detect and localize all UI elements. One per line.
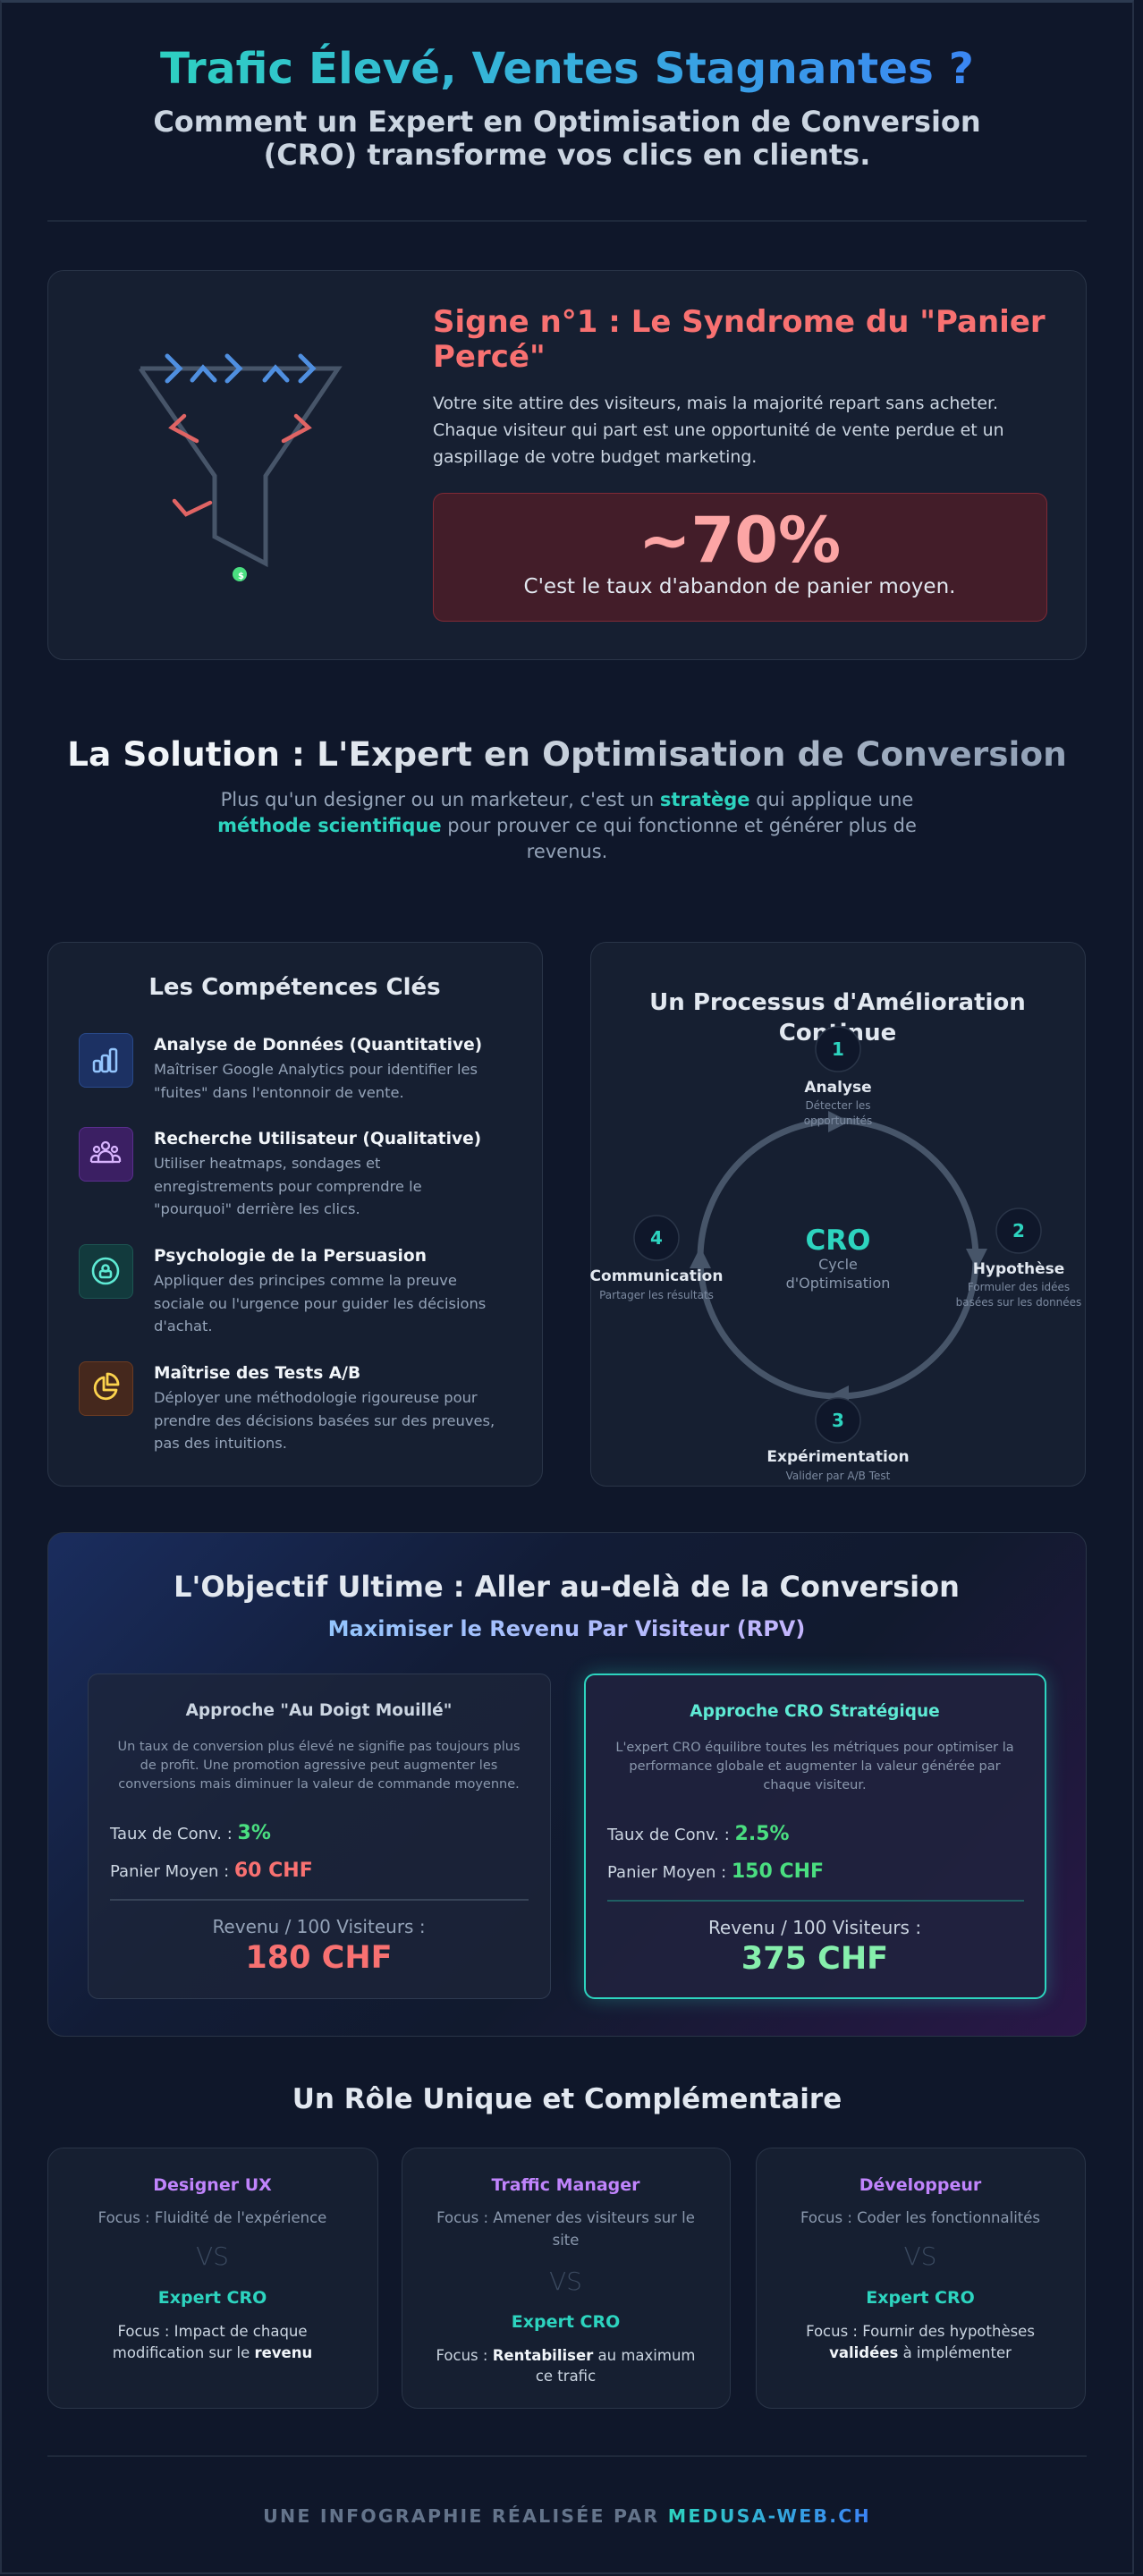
panel: traffic manager vs expert CRO: Focus : Amener des visiteurs sur le [436, 2209, 695, 2226]
title: Trafic Élevé, Ventes Stagnantes ? [160, 44, 974, 94]
step 3 expérimentation: 3 [832, 1410, 844, 1431]
skill: psychologie de la persuasion: d'achat. [154, 1318, 213, 1335]
skill: analyse de données [79, 1033, 482, 1101]
skill: recherche utilisateur [79, 1127, 481, 1217]
step 2 hypothèse: basées sur les données [956, 1296, 1081, 1309]
skill: tests A/B: Déployer une méthodologie rigoureuse pour [154, 1389, 478, 1406]
card: approche au doigt mouillé: Panier Moyen : 60 CHF [110, 1860, 313, 1882]
text block: description: Chaque visiteur qui part est une opportunité de vente perdue et un [433, 420, 1004, 440]
heading: signe n°1: Signe n°1 : Le Syndrome du "Panier [433, 304, 1046, 340]
card: approche CRO stratégique: L'expert CRO équilibre toutes les métriques pour optimiser la [615, 1741, 1014, 1755]
icon: leaky funnel: $ [238, 572, 244, 581]
step 1 analyse: Analyse [804, 1079, 872, 1097]
card: approche au doigt mouillé: Un taux de conversion plus élevé ne signifie pas toujours plus [118, 1740, 521, 1754]
panel: traffic manager vs expert CRO: site [553, 2232, 579, 2249]
icon: persuasion [79, 1244, 133, 1299]
panel: signe n°1 panier percé [47, 270, 1087, 660]
skill: psychologie de la persuasion: Appliquer des principes comme la preuve [154, 1272, 457, 1289]
panel: objectif ultime [47, 1532, 1087, 2037]
card: approche au doigt mouillé: Revenu / 100 Visiteurs : [212, 1916, 426, 1937]
card: approche au doigt mouillé: Taux de Conv. : 3% [110, 1822, 271, 1844]
step 2 hypothèse: Formuler des idées [968, 1281, 1070, 1293]
heading: processus: Un Processus d'Amélioration [649, 989, 1026, 1016]
icon: leaky funnel [139, 354, 342, 581]
icon: pie chart [79, 1361, 133, 1416]
panel: designer UX vs expert CRO: modification sur le revenu [113, 2344, 312, 2361]
card: approche au doigt mouillé [88, 1674, 551, 1999]
skill: psychologie de la persuasion: sociale ou l'urgence pour guider les décisions [154, 1295, 486, 1311]
skill: tests A/B: pas des intuitions. [154, 1435, 287, 1452]
card: approche CRO stratégique: chaque visiteur. [763, 1778, 867, 1792]
heading: processus [649, 989, 1026, 1046]
card: approche au doigt mouillé: conversions mais diminuer la valeur de commande moyenne. [118, 1777, 520, 1792]
heading: la solution: La Solution : L'Expert en Optimisation de Conversion [67, 734, 1067, 774]
heading: compétences: Les Compétences Clés [148, 974, 441, 1001]
step 3 expérimentation: Expérimentation [766, 1448, 910, 1466]
skill: recherche utilisateur: Recherche Utilisateur (Qualitative) [154, 1130, 481, 1148]
heading: processus: Continue [779, 1020, 896, 1046]
skill: analyse de données: "fuites" dans l'entonnoir de vente. [154, 1084, 404, 1101]
subtitle: (CRO) transforme vos clics en clients. [264, 138, 870, 172]
step 4 communication: Partager les résultats [599, 1289, 714, 1301]
panel: traffic manager vs expert CRO: Expert CRO [512, 2312, 620, 2332]
center label CRO: Cycle [818, 1256, 858, 1273]
callout: 70% stat [433, 493, 1047, 622]
skill: tests A/B [79, 1361, 495, 1452]
chart: CRO cycle [590, 1026, 1081, 1482]
panel: compétences clés [47, 942, 543, 1487]
step 1 analyse: 1 [832, 1038, 844, 1060]
card: approche CRO stratégique [584, 1674, 1046, 1999]
panel: designer UX vs expert CRO: Focus : Impact de chaque [117, 2323, 308, 2340]
panel: traffic manager vs expert CRO: Focus : Rentabiliser au maximum [436, 2347, 695, 2364]
card: approche CRO stratégique: Approche CRO Stratégique [690, 1702, 940, 1721]
title [0, 41, 1134, 97]
text block: solution description [217, 789, 917, 862]
panel: développeur vs expert CRO: validées à implémenter [829, 2344, 1012, 2361]
panel: développeur vs expert CRO: Focus : Fournir des hypothèses [806, 2323, 1035, 2340]
panel: designer UX vs expert CRO: Expert CRO [158, 2288, 267, 2308]
panel: développeur vs expert CRO: Développeur [859, 2175, 981, 2195]
panel: designer UX vs expert CRO: Designer UX [153, 2175, 272, 2195]
panel: processus d'amélioration continue [590, 942, 1086, 1487]
heading: rôle unique: Un Rôle Unique et Complémentaire [292, 2083, 842, 2115]
icon: bar chart [79, 1033, 133, 1088]
center label CRO [786, 1224, 890, 1292]
text block: solution description: méthode scientifique pour prouver ce qui fonctionne et générer plus de [217, 815, 917, 836]
panel: développeur vs expert CRO: Focus : Coder les fonctionnalités [800, 2209, 1040, 2226]
card: approche CRO stratégique: Taux de Conv. : 2.5% [607, 1823, 790, 1845]
card: approche au doigt mouillé: 180 CHF [245, 1940, 393, 1976]
text block: solution description: Plus qu'un designer ou un marketeur, c'est un stratège qui applique une [221, 789, 913, 810]
heading: signe n°1 [433, 304, 1046, 375]
heading: objectif: L'Objectif Ultime : Aller au-delà de la Conversion [174, 1570, 960, 1604]
step 2 hypothèse: Hypothèse [973, 1260, 1064, 1278]
skill: tests A/B: prendre des décisions basées sur des preuves, [154, 1411, 495, 1429]
panel: traffic manager vs expert CRO [402, 2148, 731, 2409]
skill: tests A/B: Maîtrise des Tests A/B [154, 1364, 360, 1383]
card: approche CRO stratégique: Panier Moyen : 150 CHF [607, 1860, 824, 1883]
footer: UNE INFOGRAPHIE RÉALISÉE PAR MEDUSA-WEB.CH [263, 2505, 871, 2527]
skill: psychologie de la persuasion: Psychologie de la Persuasion [154, 1247, 427, 1266]
subtitle [153, 105, 981, 172]
text block: description: Votre site attire des visiteurs, mais la majorité repart sans acheter. [433, 394, 998, 413]
skill: analyse de données: Maîtriser Google Analytics pour identifier les [154, 1061, 478, 1078]
step 1 analyse [804, 1027, 872, 1127]
subtitle: Comment un Expert en Optimisation de Conversion [153, 105, 981, 139]
text block: solution description: revenus. [527, 841, 607, 862]
callout: 70% stat: ~70% [639, 504, 841, 577]
skill: recherche utilisateur: "pourquoi" derrière les clics. [154, 1200, 360, 1217]
panel: traffic manager vs expert CRO: ce trafic [536, 2368, 596, 2385]
step 4 communication: Communication [590, 1267, 723, 1285]
card: approche CRO stratégique: 375 CHF [741, 1941, 888, 1977]
panel: designer UX vs expert CRO: Focus : Fluidité de l'expérience [98, 2209, 326, 2226]
center label CRO: d'Optimisation [786, 1275, 890, 1292]
subheading: RPV: Maximiser le Revenu Par Visiteur (RPV) [328, 1616, 805, 1641]
panel: développeur vs expert CRO: VS [904, 2241, 936, 2271]
step 3 expérimentation [766, 1398, 910, 1482]
heading: signe n°1: Percé" [433, 339, 546, 375]
step 4 communication [590, 1216, 723, 1301]
card: approche CRO stratégique: performance globale et augmenter la valeur générée par [629, 1759, 1001, 1774]
center label CRO: CRO [806, 1224, 870, 1257]
step 2 hypothèse: 2 [1012, 1220, 1025, 1241]
panel: traffic manager vs expert CRO: Traffic Manager [491, 2175, 640, 2195]
panel: développeur vs expert CRO [756, 2148, 1086, 2409]
step 4 communication: 4 [650, 1227, 663, 1249]
panel: traffic manager vs expert CRO: VS [549, 2267, 582, 2296]
callout: 70% stat: C'est le taux d'abandon de panier moyen. [524, 575, 955, 598]
panel: designer UX vs expert CRO [47, 2148, 378, 2409]
card: approche au doigt mouillé: de profit. Une promotion agressive peut augmenter les [140, 1758, 497, 1773]
step 3 expérimentation: Valider par A/B Test [786, 1470, 891, 1482]
text block: description: gaspillage de votre budget marketing. [433, 447, 757, 467]
card: approche au doigt mouillé: Approche "Au Doigt Mouillé" [186, 1701, 452, 1720]
panel: designer UX vs expert CRO: VS [196, 2241, 229, 2271]
step 2 hypothèse [956, 1208, 1081, 1309]
panel: développeur vs expert CRO: Expert CRO [866, 2288, 975, 2308]
icon: users [79, 1127, 133, 1182]
step 1 analyse: opportunités [804, 1114, 872, 1127]
step 1 analyse: Détecter les [805, 1099, 871, 1112]
skill: recherche utilisateur: enregistrements pour comprendre le [154, 1177, 422, 1195]
skill: analyse de données: Analyse de Données (Quantitative) [154, 1036, 482, 1055]
card: approche CRO stratégique: Revenu / 100 Visiteurs : [708, 1917, 921, 1938]
text block: description [433, 394, 1004, 467]
skill: recherche utilisateur: Utiliser heatmaps, sondages et [154, 1155, 380, 1172]
skill: psychologie de la persuasion [79, 1244, 486, 1335]
